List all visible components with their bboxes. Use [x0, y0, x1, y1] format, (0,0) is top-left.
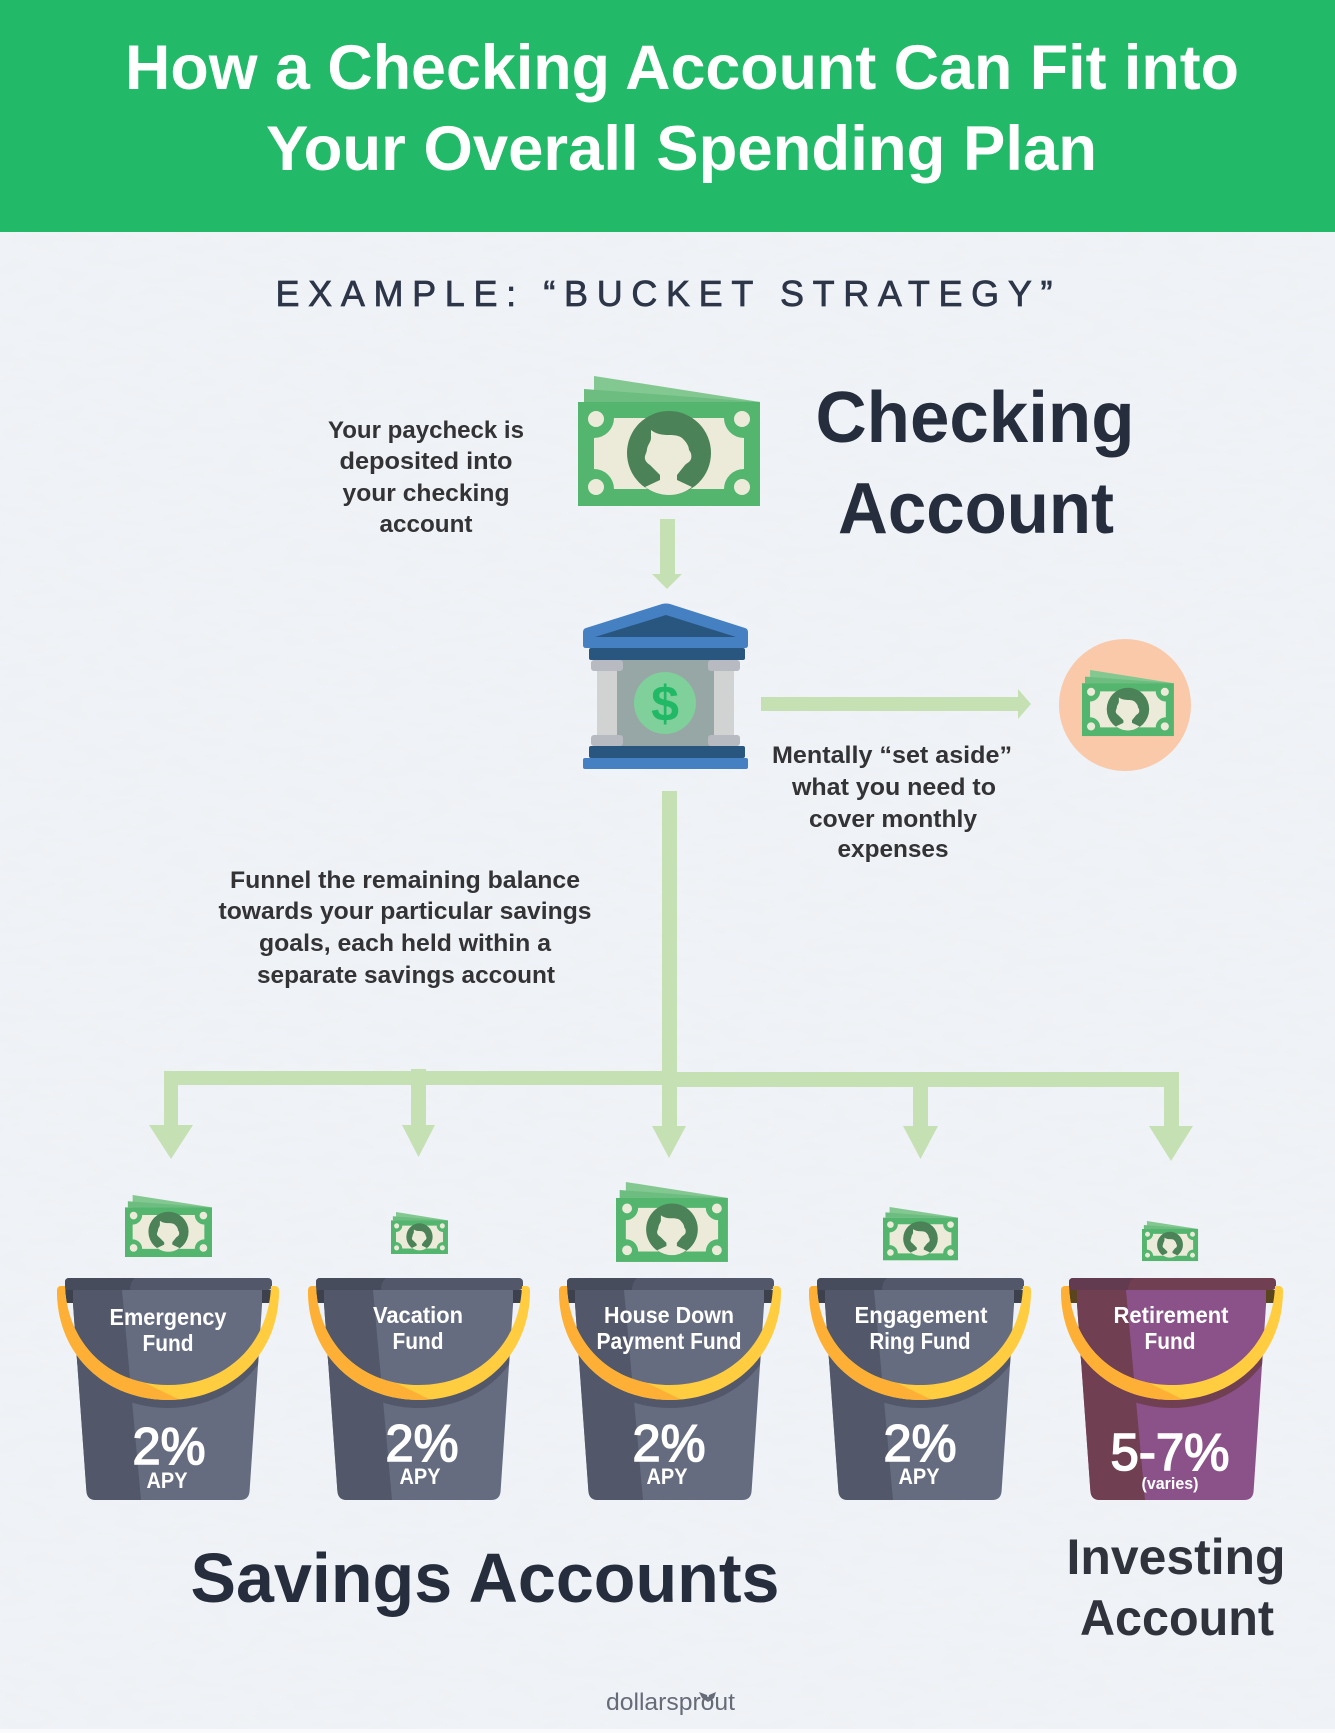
- text: funnel balance: goals, each held within a: [259, 930, 552, 957]
- title: [125, 33, 1239, 184]
- text: funnel balance: separate savings account: [257, 962, 555, 989]
- text: paycheck deposited: [328, 417, 524, 538]
- bucket: retirement fund: 5-7%: [1110, 1424, 1230, 1482]
- bucket: vacation fund: APY: [400, 1464, 441, 1489]
- bucket: emergency fund: Fund: [142, 1330, 194, 1356]
- bucket: vacation fund: Vacation: [373, 1302, 463, 1328]
- bucket: engagement ring fund: [809, 1207, 1031, 1500]
- icon: bank: [583, 604, 748, 769]
- heading: checking account: Checking: [816, 378, 1134, 458]
- bucket: retirement fund: (varies): [1142, 1474, 1198, 1493]
- text: paycheck deposited: your checking: [342, 480, 510, 507]
- text: paycheck deposited: Your paycheck is: [328, 417, 524, 444]
- text: funnel balance: Funnel the remaining balance: [230, 867, 580, 894]
- header banner: [0, 0, 1335, 232]
- text: paycheck deposited: deposited into: [340, 448, 512, 475]
- bucket: vacation fund: Fund: [392, 1328, 444, 1354]
- text: set aside: expenses: [838, 836, 948, 863]
- bucket: house down payment fund: 2%: [632, 1415, 706, 1473]
- bucket: emergency fund: Emergency: [110, 1304, 227, 1330]
- bucket: engagement ring fund: 2%: [884, 1415, 956, 1473]
- bucket: retirement fund: Fund: [1144, 1328, 1196, 1354]
- text: paycheck deposited: account: [380, 511, 473, 538]
- icon: bank: $: [651, 676, 679, 732]
- bucket: house down payment fund: [559, 1182, 781, 1500]
- bucket: emergency fund: 2%: [132, 1418, 206, 1476]
- arrow: bank to monthly expenses: [761, 689, 1031, 719]
- bucket: engagement ring fund: Ring Fund: [870, 1328, 970, 1354]
- bucket: emergency fund: [57, 1195, 279, 1500]
- bucket: engagement ring fund: APY: [898, 1464, 940, 1489]
- title: Your Overall Spending Plan: [266, 114, 1097, 184]
- text: set aside: what you need to: [791, 774, 996, 801]
- heading: investing account: [1066, 1529, 1286, 1646]
- title: How a Checking Account Can Fit into: [125, 33, 1239, 103]
- bucket: house down payment fund: House Down: [604, 1302, 734, 1328]
- bucket: vacation fund: [308, 1212, 530, 1500]
- bucket: retirement fund: Retirement: [1114, 1302, 1229, 1328]
- heading: investing account: Account: [1080, 1590, 1274, 1646]
- bucket: retirement fund: [1061, 1221, 1283, 1500]
- bucket: vacation fund: 2%: [386, 1415, 458, 1473]
- icon: monthly expenses bill: [1059, 639, 1191, 771]
- logo: dollarsprout: dollarsprout: [606, 1689, 735, 1716]
- arrow tree: bank to five buckets: [149, 791, 1193, 1161]
- bucket: house down payment fund: APY: [646, 1464, 688, 1489]
- bucket: house down payment fund: Payment Fund: [596, 1328, 742, 1354]
- heading: checking account: Account: [838, 469, 1114, 549]
- arrow: bill to bank: [652, 519, 682, 589]
- text: funnel balance: [218, 867, 592, 989]
- text: set aside: cover monthly: [809, 806, 978, 833]
- icon: paycheck bill: [578, 376, 760, 506]
- text: funnel balance: towards your particular savings: [218, 898, 592, 925]
- text: set aside: Mentally “set aside”: [772, 742, 1012, 769]
- bucket: engagement ring fund: Engagement: [854, 1302, 988, 1328]
- heading: investing account: Investing: [1066, 1529, 1286, 1585]
- heading: savings accounts: Savings Accounts: [190, 1539, 780, 1617]
- heading: checking account: [816, 378, 1134, 549]
- subtitle: EXAMPLE: “BUCKET STRATEGY”: [276, 273, 1052, 314]
- text: set aside: [772, 742, 1012, 863]
- bucket: emergency fund: APY: [146, 1468, 188, 1493]
